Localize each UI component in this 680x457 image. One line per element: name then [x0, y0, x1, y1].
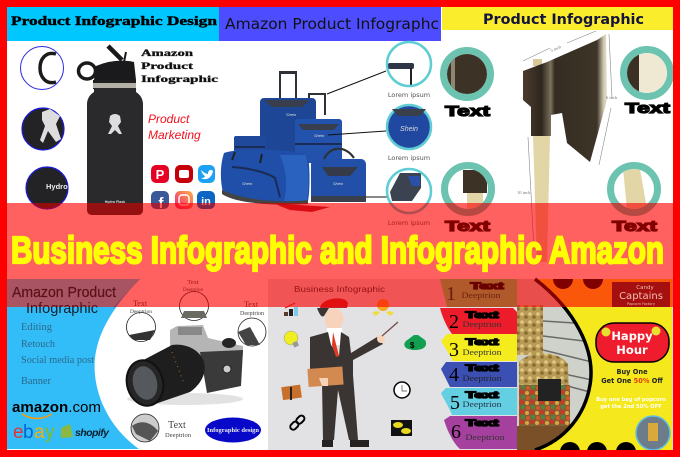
tab 5: 5 [450, 392, 460, 414]
callout: text description bottom [165, 420, 192, 439]
panel: axe product [442, 7, 673, 262]
bottle [78, 46, 143, 215]
luggage set: Shein [242, 181, 253, 186]
detail circle: camera dial [238, 318, 266, 346]
tab 5: Text [466, 390, 498, 400]
badge: happy hour: Happy [611, 329, 653, 343]
title: amazon product infographic: Infographic [26, 300, 98, 317]
camera [122, 325, 243, 410]
detail circle: axe handle [610, 166, 658, 212]
label: amazon product infographic [141, 49, 218, 85]
tab 3 [441, 334, 517, 361]
callout: text description left [130, 299, 152, 315]
title: amazon product infographic [12, 284, 117, 317]
tab 4: Deeptrion [462, 374, 502, 383]
tab 2: Text [466, 310, 498, 320]
social media icons: P [156, 167, 165, 182]
tab 2: 2 [449, 311, 459, 333]
label: amazon product infographic: Product [141, 62, 194, 72]
social media icons: in [201, 196, 211, 208]
detail circle: bottle handle [20, 46, 64, 90]
label: product marketing: Product [148, 112, 190, 126]
detail circle: camera base [131, 414, 159, 442]
tab 4: Text [466, 363, 498, 373]
header: amazon product infographc [219, 7, 441, 41]
service list: Social media post [21, 355, 94, 366]
badge: infographic design [205, 418, 261, 442]
icon: growth chart [284, 303, 298, 316]
blue curved background [7, 279, 140, 449]
label: text bottom left: Text [445, 218, 490, 235]
header: product infographic [442, 7, 673, 30]
badge: happy hour [596, 323, 669, 362]
detail circle: axe neck [444, 166, 492, 212]
callout: text description top: Text [187, 279, 199, 286]
logo: amazon.com: amazon.com [12, 399, 101, 416]
offer: buy one get one: Get One 50% Off [601, 377, 663, 385]
callout: text description top: Deeptrion [183, 288, 203, 293]
header: amazon product infographc: Amazon Product Infographc [225, 15, 439, 33]
panel: numbered list and happy hour [438, 269, 673, 457]
detail circle: logo [22, 108, 64, 150]
panel: business infographic [268, 279, 438, 450]
callout: text description right [240, 300, 264, 317]
social media icons: f [158, 195, 164, 212]
panel: bottle product [7, 7, 219, 215]
tab 6: 6 [451, 421, 461, 443]
header: product infographic design [7, 7, 219, 41]
logo: ebay: a [34, 422, 45, 443]
tab 6: Deeptrion [466, 433, 504, 442]
icon: money bag: $ [410, 341, 415, 350]
callout: text description right: Deeptrion [240, 311, 264, 317]
luggage set: Shein [286, 112, 297, 117]
panel: camera product [7, 279, 268, 450]
service list [21, 322, 94, 387]
tab 5 [441, 388, 517, 415]
detail circle: bag corner [387, 169, 431, 213]
callout: text description left: Text [133, 299, 148, 308]
tab 1 over band [440, 279, 517, 307]
title ribbon over band [7, 279, 140, 307]
offer: buy one get one [601, 368, 663, 385]
photo badge [636, 416, 670, 450]
offer: popcorn note [596, 397, 666, 410]
logo: shopify [61, 424, 110, 439]
label: amazon product infographic: Infographic [141, 75, 218, 85]
logo: ebay [13, 422, 55, 443]
translucent red band [7, 203, 673, 307]
connector lines [327, 71, 388, 197]
tab 3: 3 [449, 339, 459, 361]
icon: briefcase [281, 385, 302, 400]
detail circle: bag logo: Shein [400, 126, 418, 133]
tab 4: 4 [449, 364, 459, 386]
axe with dimensions: 6 inch [606, 95, 618, 100]
logo: candy captains: Captains [619, 291, 663, 302]
icon: light bulb [284, 331, 299, 348]
service list: Banner [21, 376, 51, 387]
icon: clock [394, 382, 410, 398]
detail circle: camera top [180, 292, 208, 320]
tab 5: Deeptrion [462, 400, 502, 409]
logo: ebay: e [13, 422, 24, 443]
luggage set [221, 71, 366, 212]
bottle: Hydro Flask [105, 200, 125, 204]
axe with dimensions: 10 inch [517, 190, 531, 195]
detail circle: hydro [26, 167, 68, 209]
offer: popcorn note: Buy one bag of popcorn [596, 397, 666, 403]
tab 2 [440, 308, 517, 334]
label: amazon product infographic: Amazon [141, 49, 194, 59]
axe with dimensions [517, 31, 618, 262]
logo: ebay: b [23, 422, 34, 443]
decorative dots [553, 269, 636, 457]
badge: infographic design: Infographic design [207, 427, 260, 434]
tab 1 over band: 1 [446, 283, 456, 305]
callout: text description bottom: Text [168, 420, 186, 431]
label: text bottom right: Text [612, 218, 657, 235]
tab 3: Deeptrion [462, 348, 502, 357]
label: product marketing: Marketing [148, 128, 201, 142]
label: text top left: Text [445, 103, 490, 120]
caption: lorem ipsum 1: Lorem ipsum [388, 91, 430, 99]
icon: money bag [404, 335, 426, 350]
heading: business infographic: Business Infographic [294, 284, 386, 294]
caption: lorem ipsum 2: Lorem ipsum [388, 154, 430, 162]
offer: buy one get one: Buy One [616, 368, 648, 376]
tab 2: Deeptrion [462, 320, 502, 329]
callout: text description bottom: Deeptrion [165, 432, 192, 439]
label: product marketing [148, 112, 201, 142]
label: text top right: Text [625, 100, 670, 117]
badge: happy hour: Hour [616, 343, 648, 357]
tab 1 over band: Deeptrion [462, 291, 500, 300]
tab 6 [444, 416, 517, 449]
panel: luggage product [219, 7, 441, 227]
tab 3: Text [466, 337, 498, 347]
logo: candy captains: Popcorn Factory [627, 302, 655, 306]
axe with dimensions: 5 inch [550, 44, 563, 53]
logo: shopify: shopify [75, 427, 110, 439]
icon: coins [391, 420, 412, 436]
luggage set: Shein [314, 133, 325, 138]
detail circle: camera corner [126, 312, 156, 342]
icon: award [372, 299, 394, 316]
social media icons [151, 165, 215, 212]
service list: Editing [21, 322, 53, 333]
detail circle: handle [387, 42, 431, 86]
businessman with pointer [307, 298, 398, 447]
yellow promo background [517, 279, 672, 450]
logo: candy captains [612, 282, 670, 307]
callout: text description top [183, 279, 203, 293]
header: product infographic design: Product Infographic Design [11, 14, 217, 28]
callout: text description left: Deeptrion [130, 309, 152, 315]
detail circle: axe poll [444, 50, 490, 98]
icon: chain link [289, 414, 306, 431]
detail circle: hydro: Hydro [46, 182, 68, 191]
title: amazon product infographic: Amazon Product [12, 284, 117, 301]
luggage set: Shein [333, 181, 344, 186]
detail circle: bag logo [387, 105, 431, 149]
tab 4 [441, 362, 517, 387]
callout: text description right: Text [244, 300, 259, 309]
detail circle: axe edge [624, 50, 670, 96]
header: product infographic: Product Infographic [483, 12, 644, 28]
service list: Retouch [21, 339, 56, 350]
caption: lorem ipsum 3: Lorem ipsum [388, 219, 430, 227]
tab 1 over band: Text [470, 281, 504, 291]
logo: candy captains: Candy [636, 285, 654, 291]
store photo [517, 278, 593, 450]
offer: popcorn note: get the 2nd 50% OFF [600, 404, 662, 410]
tab 6: Text [466, 418, 498, 428]
logo: ebay: y [45, 422, 55, 443]
